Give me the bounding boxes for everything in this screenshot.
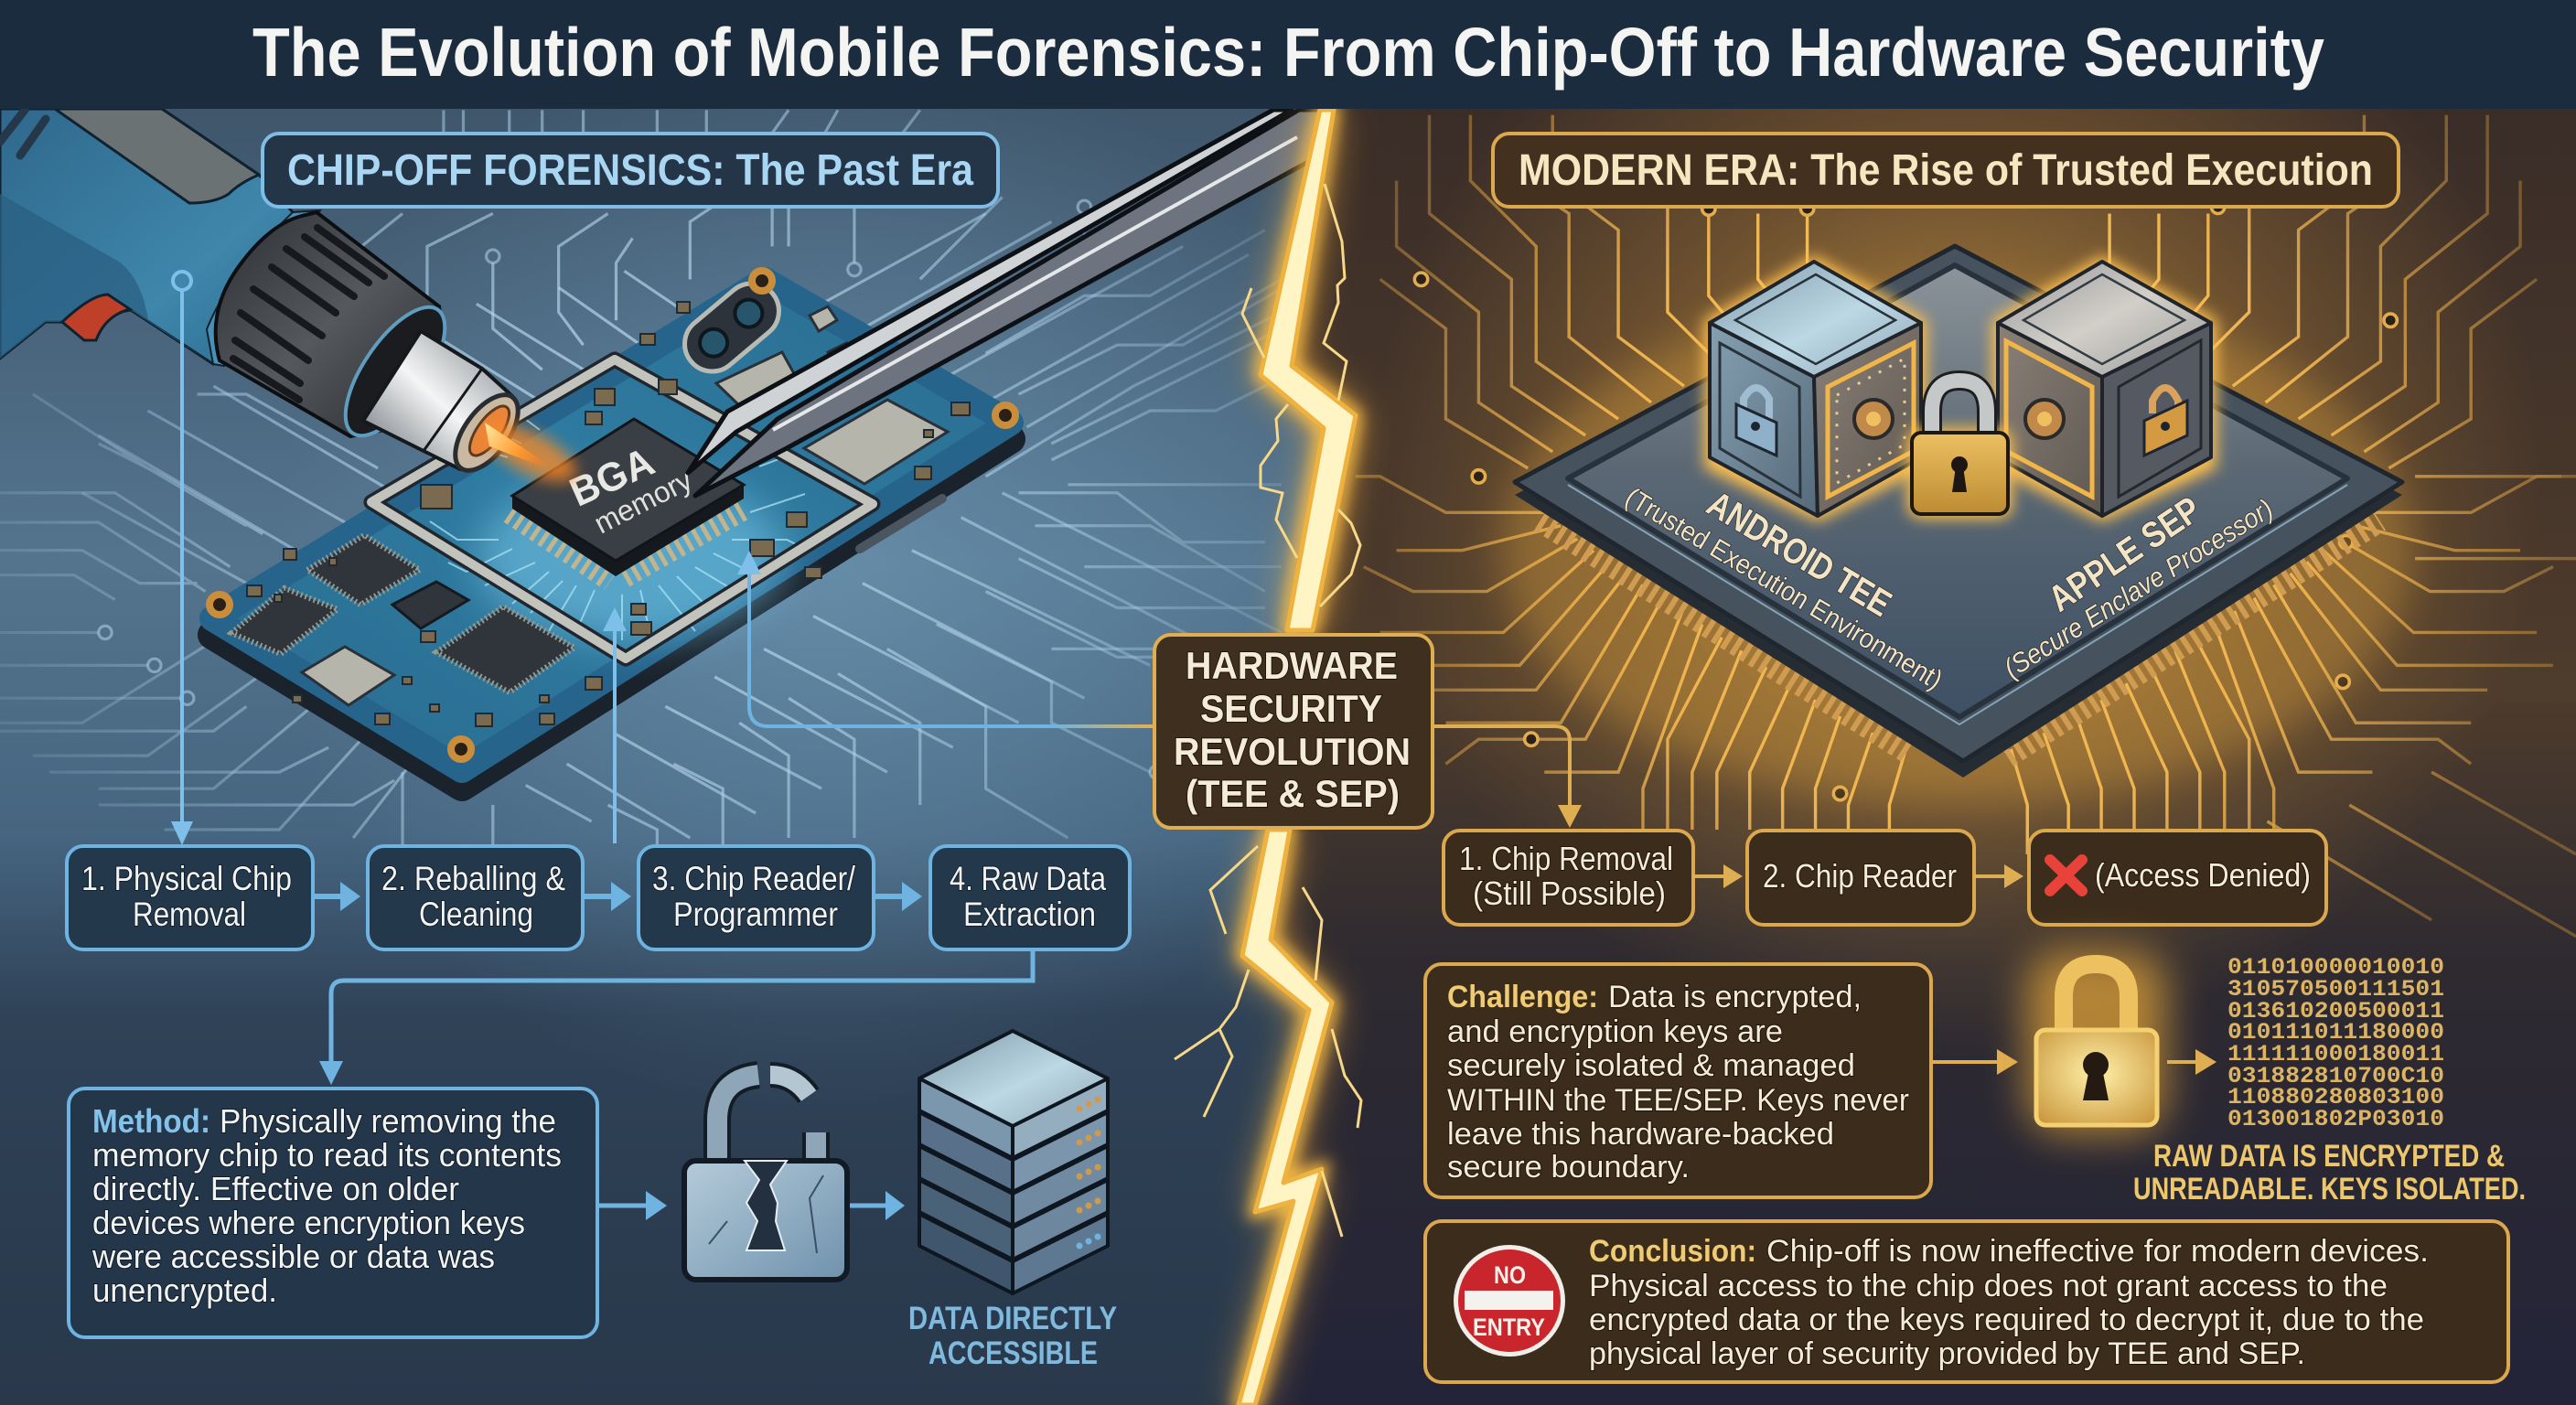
safe blue padlock: [1736, 388, 1776, 456]
chip label memory: memory: [589, 463, 697, 540]
panel: challenge: secure boundary.: [1447, 1150, 1690, 1185]
panel: method: directly. Effective on older: [92, 1170, 459, 1207]
chip label BGA: BGA: [564, 439, 660, 515]
small SMD parts: [247, 302, 970, 726]
label: raw data encrypted: RAW DATA IS ENCRYPTED &: [2153, 1139, 2505, 1174]
process: chip-off steps: [67, 846, 1130, 949]
step 1: (Still Possible): [1473, 874, 1666, 912]
step 1: 1. Chip Removal: [1459, 840, 1673, 877]
arrow 2 to 3: [1974, 864, 2023, 888]
panel: right background: [1244, 109, 2576, 1405]
lightning branches: [1175, 184, 1361, 1237]
encrypted binary data: 310570500111501: [2227, 976, 2444, 1003]
heading: chip-off: CHIP-OFF FORENSICS: The Past Era: [287, 146, 973, 195]
chip label: Apple SEP: APPLE SEP: [2042, 489, 2208, 620]
phone chassis: [212, 296, 1011, 787]
step 3 access denied: [2029, 831, 2326, 925]
encrypted binary data: 111111000180011: [2227, 1041, 2444, 1067]
safe gold padlock: [2144, 388, 2187, 456]
conclusion text: [1589, 1234, 2429, 1371]
callout: hardware security revolution: [1154, 635, 1433, 828]
panel: method: devices where encryption keys: [92, 1204, 525, 1241]
chip top: [512, 419, 744, 561]
panel: challenge: leave this hardware-backed: [1447, 1117, 1834, 1152]
safe: Android TEE: [1710, 262, 1921, 516]
heading: modern era: [1493, 134, 2399, 207]
arrow: heat gun to step 1: [171, 272, 193, 845]
safe dial: [1854, 400, 1893, 438]
left trace end pads: [99, 192, 1164, 778]
step 4: Extraction: [963, 896, 1096, 933]
encrypted binary data: 013001802P03010: [2227, 1106, 2444, 1132]
phone with exposed circuit board: [209, 271, 1015, 787]
chip base: [1515, 260, 2402, 778]
icon: no entry sign: NO: [1494, 1261, 1526, 1289]
step 4: [930, 846, 1130, 949]
conclusion text: Physical access to the chip does not grant access to the: [1589, 1269, 2388, 1303]
step 3 access denied: (Access Denied): [2095, 856, 2311, 894]
step 2: 2. Chip Reader: [1763, 857, 1957, 895]
step 1: 1. Physical Chip: [81, 860, 292, 897]
step 3: Programmer: [673, 896, 838, 933]
conclusion text: Conclusion:: [1589, 1234, 1756, 1269]
icon: centre padlock: [1912, 381, 2008, 514]
arrow: step 4 to method: [319, 949, 1033, 1085]
chip label: Android TEE: ANDROID TEE: [1701, 484, 1898, 625]
circuit board: [212, 280, 1011, 770]
safe left face: [1710, 323, 1818, 516]
panel: method: Method:: [92, 1102, 210, 1140]
icon: no entry sign: ENTRY: [1473, 1314, 1545, 1341]
step 3: 3. Chip Reader/: [652, 860, 856, 897]
safe right face: [1814, 323, 1921, 516]
heat flame: [477, 412, 585, 494]
lightning divider: [1175, 110, 1361, 1405]
step 2: 2. Reballing &: [381, 860, 565, 897]
chip glow: [1500, 293, 2415, 805]
title bar: [0, 0, 2576, 109]
secure processor chip: [1500, 246, 2415, 805]
encrypted binary data: 011010000010010: [2227, 954, 2444, 981]
collar vents: [233, 228, 384, 400]
gun vents: [0, 109, 46, 156]
panel: challenge: Challenge:: [1447, 980, 1598, 1014]
tweezers: [688, 110, 1322, 496]
step 2: [1747, 831, 1974, 925]
left circuit traces: [0, 110, 1298, 846]
safe glow: [1710, 262, 1921, 516]
panel: challenge: securely isolated & managed: [1447, 1048, 1855, 1083]
arrow 1 to 2: [313, 882, 360, 911]
encrypted binary data: 010111011180000: [2227, 1019, 2444, 1046]
arrow 1 to 2: [1693, 864, 1743, 888]
arrow: revolution box to frame: [737, 551, 1154, 726]
callout: hardware security revolution: HARDWARE: [1186, 644, 1398, 687]
glow under memory chip: [476, 476, 787, 640]
conclusion text: physical layer of security provided by TEE and SEP.: [1589, 1336, 2305, 1371]
title: The Evolution of Mobile Forensics: From Chip-Off to Hardware Security: [252, 14, 2324, 91]
step 1: [67, 846, 313, 949]
panel: method: Physically removing the: [220, 1102, 556, 1140]
gun body: [0, 109, 293, 364]
step 3: [639, 846, 874, 949]
conclusion text: Chip-off is now ineffective for modern devices.: [1766, 1234, 2429, 1269]
right circuit traces: [1356, 115, 2576, 937]
panel: challenge: and encryption keys are: [1447, 1014, 1783, 1049]
lightning bolt upper: [1261, 110, 1356, 630]
step 2: Cleaning: [419, 896, 533, 933]
step 2: [368, 846, 583, 949]
phone side buttons: [860, 499, 942, 549]
safe top face: [1710, 262, 1921, 377]
gold mounting holes: [209, 271, 1015, 759]
collar mouth: [327, 292, 463, 451]
gun handle shade: [0, 194, 213, 364]
silver components: [302, 306, 948, 705]
chips on board: [231, 535, 574, 692]
safe: Apple SEP: [1998, 262, 2211, 516]
lightning glow: [1239, 110, 1356, 1405]
lightning bolt lower: [1239, 830, 1332, 1405]
chip pins: [1541, 519, 2378, 755]
encrypted binary data: 013610200500011: [2227, 998, 2444, 1024]
heat gun: [0, 109, 531, 481]
panel: method: unencrypted.: [92, 1271, 277, 1309]
BGA memory chip: [510, 419, 745, 580]
label: raw data encrypted: [2133, 1139, 2526, 1207]
icon: server stack: [919, 1031, 1108, 1293]
gun collar ring: [207, 210, 320, 366]
encrypted binary data: 110880280803100: [2227, 1084, 2444, 1110]
encrypted binary data: [2227, 954, 2444, 1132]
arrow: method to broken lock: [599, 1191, 667, 1220]
process: modern steps: [1444, 831, 2326, 925]
right trace end pads: [1357, 200, 2397, 800]
label: data directly accessible: DATA DIRECTLY: [908, 1301, 1117, 1336]
panel: method: memory chip to read its contents: [92, 1136, 562, 1174]
heading: chip-off: [263, 134, 998, 207]
label: data directly accessible: ACCESSIBLE: [928, 1335, 1098, 1371]
gun collar: [216, 212, 440, 436]
safe left door: [1720, 343, 1800, 497]
panel: method: [69, 1089, 597, 1337]
panel: challenge: [1425, 964, 1931, 1197]
chip label: Android TEE: (Trusted Execution Environment): [1620, 482, 1948, 695]
panel: method: were accessible or data was: [91, 1238, 495, 1275]
heading: modern era: MODERN ERA: The Rise of Trusted Execution: [1519, 146, 2373, 195]
lightning halo: [1239, 110, 1356, 1405]
arrow: step 3 to chip: [603, 607, 627, 843]
metal shield frame: [371, 359, 873, 659]
step 1: [1444, 831, 1693, 925]
chip label: Apple SEP: (Secure Enclave Processor): [1999, 494, 2279, 684]
panel: conclusion: [1425, 1221, 2508, 1382]
icon: red cross: [2050, 860, 2082, 891]
arrow 2 to 3: [583, 882, 631, 911]
gun top band: [55, 109, 259, 203]
icon: no entry sign: [1454, 1245, 1565, 1357]
panel: left background: [0, 109, 1336, 1405]
icon: broken padlock: [684, 1075, 847, 1280]
arrow: challenge to lock: [1932, 1049, 2018, 1075]
step 1: Removal: [133, 896, 246, 933]
label: data directly accessible: [908, 1301, 1117, 1371]
nozzle tip: [443, 384, 531, 481]
step 4: 4. Raw Data: [950, 860, 1106, 897]
arrow 3 to 4: [874, 882, 922, 911]
arrow: lock to server: [850, 1191, 905, 1220]
callout: hardware security revolution: SECURITY: [1200, 687, 1382, 730]
camera module: [673, 273, 790, 382]
metal nozzle: [363, 331, 512, 469]
callout: hardware security revolution: REVOLUTION: [1174, 730, 1411, 773]
chip raised layer: [1568, 265, 2347, 717]
panel: challenge: WITHIN the TEE/SEP. Keys never: [1447, 1083, 1909, 1118]
board fine traces: [430, 402, 805, 640]
conclusion text: encrypted data or the keys required to decrypt it, due to the: [1589, 1303, 2424, 1337]
panel: challenge: Data is encrypted,: [1608, 980, 1862, 1014]
icon: glowing gold padlock: [2026, 951, 2166, 1134]
safe door frame: [1828, 343, 1914, 497]
callout: hardware security revolution: (TEE & SEP): [1186, 772, 1400, 815]
arrow: lock to data: [2167, 1049, 2216, 1075]
encrypted binary data: 031882810700C10: [2227, 1063, 2444, 1089]
gun trigger: [62, 295, 130, 340]
chip pins: [510, 508, 745, 580]
arrow: revolution to step 1: [1433, 726, 1582, 828]
